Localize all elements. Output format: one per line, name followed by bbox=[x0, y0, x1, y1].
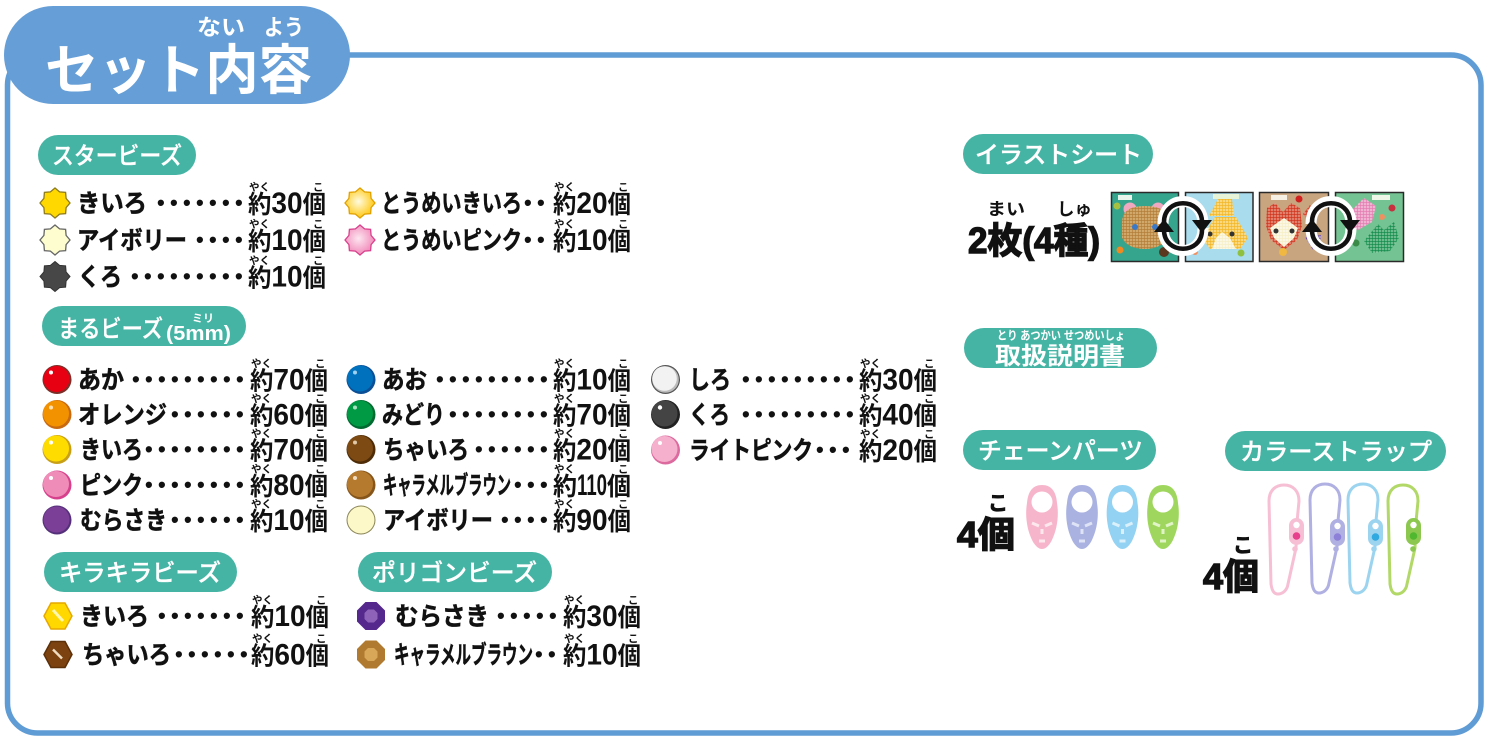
row: star clear pink: 約10個 bbox=[553, 224, 631, 257]
row: red: やく bbox=[251, 358, 272, 370]
heading: instruction manual: 取扱説明書 bbox=[995, 343, 1125, 370]
row: white: しろ bbox=[689, 366, 731, 394]
row: star black: ••••••••• bbox=[131, 264, 248, 288]
row: star ivory: やく bbox=[249, 218, 270, 230]
row: orange bbox=[42, 393, 328, 432]
row: star yellow: こ bbox=[313, 182, 324, 194]
row: ivory: •••• bbox=[501, 507, 553, 532]
heading: star beads: スタービーズ bbox=[52, 143, 182, 170]
row: purple: •••••• bbox=[171, 507, 249, 532]
row: star black: やく bbox=[249, 255, 270, 267]
row: star ivory bbox=[40, 218, 326, 257]
heading: instruction manual: とり あつかい せつめいしょ bbox=[997, 328, 1125, 342]
sheet: bear bbox=[1112, 192, 1178, 262]
heading: glitter beads: キラキラビーズ bbox=[59, 560, 221, 587]
sheet count: しゅ bbox=[1057, 200, 1092, 219]
row: orange: やく bbox=[251, 393, 272, 405]
row: pink: やく bbox=[251, 464, 272, 476]
row: green: やく bbox=[554, 393, 575, 405]
row: ivory bbox=[346, 498, 631, 537]
row: white: 約30個 bbox=[859, 364, 937, 396]
section: color straps bbox=[1203, 431, 1446, 597]
row: red: ••••••••• bbox=[132, 366, 249, 392]
row: glitter yellow: やく bbox=[252, 594, 273, 606]
row: star clear yellow: とうめいきいろ bbox=[381, 190, 522, 218]
section: glitter beads bbox=[44, 552, 329, 672]
row: light pink bbox=[651, 428, 937, 467]
arrow: swap loop right bbox=[1302, 202, 1360, 250]
row: light pink: やく bbox=[860, 428, 881, 440]
row: glitter yellow: きいろ bbox=[80, 603, 149, 631]
row: star clear pink: •• bbox=[524, 227, 550, 252]
row: star clear yellow: こ bbox=[618, 182, 628, 194]
row: ivory: こ bbox=[618, 498, 628, 510]
row: polygon purple: こ bbox=[628, 594, 638, 606]
row: blue: あお bbox=[382, 366, 427, 394]
row: caramel brown: キャラメルブラウン bbox=[383, 471, 511, 500]
heading: chain parts bbox=[963, 430, 1156, 470]
row: light pink: ••• bbox=[816, 437, 855, 462]
row: glitter brown: •••••• bbox=[175, 642, 253, 666]
row: star clear yellow: やく bbox=[554, 182, 575, 194]
row: star yellow: やく bbox=[249, 182, 270, 194]
row: red: 約70個 bbox=[250, 364, 328, 396]
row: green bbox=[346, 393, 631, 432]
row: yellow: やく bbox=[251, 428, 272, 440]
heading: star beads bbox=[38, 135, 196, 175]
row: pink: 約80個 bbox=[250, 469, 328, 502]
row: caramel brown: 個 bbox=[607, 473, 631, 501]
row: star ivory: こ bbox=[313, 218, 324, 230]
strap: sky blue bbox=[1348, 484, 1383, 593]
row: green: 約70個 bbox=[553, 398, 631, 432]
row: caramel brown: やく bbox=[554, 464, 575, 476]
section: illustration sheets bbox=[963, 134, 1404, 262]
row: star clear pink bbox=[345, 218, 631, 257]
row: brown: ちゃいろ bbox=[383, 436, 469, 464]
row: orange: 約60個 bbox=[250, 398, 328, 432]
row: glitter yellow: ••••••• bbox=[158, 603, 249, 628]
chain part: pink bbox=[1026, 485, 1058, 549]
row: glitter brown: 約60個 bbox=[251, 638, 329, 672]
row: polygon purple bbox=[357, 594, 641, 633]
heading: round beads: まるビーズ bbox=[58, 316, 163, 343]
sheet count bbox=[968, 200, 1100, 261]
row: polygon purple: ••••• bbox=[497, 603, 562, 628]
title tab bbox=[4, 6, 350, 104]
row: glitter brown: ちゃいろ bbox=[82, 642, 171, 670]
heading: polygon beads: ポリゴンビーズ bbox=[372, 560, 537, 587]
section: polygon beads bbox=[357, 552, 641, 672]
row: black: ••••••••• bbox=[742, 402, 859, 426]
arrow: swap loop left bbox=[1154, 202, 1212, 250]
row: pink: •••••••• bbox=[145, 472, 249, 497]
row: caramel brown: 約 bbox=[553, 473, 577, 501]
row: star black: 約10個 bbox=[248, 260, 326, 294]
row: black: こ bbox=[924, 393, 934, 405]
row: star black: こ bbox=[313, 255, 324, 267]
row: polygon caramel bbox=[357, 633, 641, 672]
row: glitter yellow: こ bbox=[316, 594, 326, 606]
count: color straps bbox=[1203, 535, 1259, 597]
heading: illustration sheets: イラストシート bbox=[975, 142, 1142, 169]
row: yellow bbox=[42, 428, 328, 466]
row: brown: やく bbox=[554, 428, 575, 440]
row: glitter brown: やく bbox=[252, 633, 273, 645]
heading: glitter beads bbox=[44, 552, 237, 592]
title tab: よう bbox=[264, 15, 304, 40]
row: ivory: やく bbox=[554, 498, 575, 510]
count: chain parts: 4個 bbox=[957, 514, 1015, 555]
row: yellow: こ bbox=[315, 428, 326, 440]
row: star clear yellow: •• bbox=[524, 190, 550, 215]
row: star yellow bbox=[40, 182, 326, 220]
chain part: periwinkle bbox=[1066, 485, 1098, 549]
row: glitter yellow: 約10個 bbox=[251, 600, 329, 633]
row: black: くろ bbox=[689, 402, 730, 430]
chain part: green bbox=[1147, 485, 1179, 549]
row: brown bbox=[346, 428, 631, 466]
strap: pink bbox=[1269, 485, 1304, 594]
row: star yellow: ••••••• bbox=[157, 190, 248, 215]
row: brown: こ bbox=[618, 428, 628, 440]
heading: color straps bbox=[1225, 431, 1446, 471]
row: ivory: アイボリー bbox=[383, 507, 493, 535]
row: light pink: ライトピンク bbox=[689, 437, 813, 465]
row: purple: やく bbox=[251, 498, 272, 510]
count: color straps: 4個 bbox=[1203, 556, 1259, 597]
row: pink bbox=[42, 464, 328, 502]
section: round beads bbox=[42, 306, 937, 537]
row: blue: ••••••••• bbox=[436, 366, 553, 392]
heading: color straps: カラーストラップ bbox=[1240, 439, 1432, 466]
row: black: 約40個 bbox=[859, 398, 937, 432]
row: black bbox=[651, 393, 937, 432]
row: glitter brown bbox=[44, 633, 329, 672]
row: star clear pink: とうめいピンク bbox=[381, 227, 522, 255]
row: star clear yellow bbox=[345, 182, 631, 220]
row: light pink: 約20個 bbox=[859, 434, 937, 467]
row: star clear yellow: 約20個 bbox=[553, 187, 631, 220]
count: color straps: こ bbox=[1233, 535, 1253, 557]
sheet: yellow dog bbox=[1186, 192, 1253, 262]
heading: polygon beads bbox=[358, 552, 552, 592]
row: green: みどり bbox=[382, 402, 445, 430]
strap: green bbox=[1388, 485, 1421, 594]
heading: round beads: ミリ bbox=[192, 313, 214, 325]
row: star black bbox=[40, 255, 326, 294]
row: black: やく bbox=[860, 393, 881, 405]
row: orange: オレンジ bbox=[78, 402, 167, 430]
row: purple: むらさき bbox=[80, 507, 167, 535]
row: blue bbox=[346, 358, 631, 396]
title tab: セット内容 bbox=[45, 41, 312, 101]
strap: periwinkle bbox=[1310, 484, 1345, 593]
row: orange: こ bbox=[315, 393, 326, 405]
row: caramel brown bbox=[346, 464, 631, 502]
row: pink: ピンク bbox=[80, 472, 143, 500]
row: caramel brown: ••• bbox=[514, 472, 553, 497]
row: caramel brown: 110 bbox=[577, 469, 607, 502]
sheet count: 2枚(4種) bbox=[968, 220, 1100, 261]
row: yellow: きいろ bbox=[80, 436, 143, 464]
heading: instruction manual bbox=[964, 328, 1157, 370]
heading: illustration sheets bbox=[963, 134, 1153, 174]
row: polygon caramel: こ bbox=[628, 633, 638, 645]
row: star ivory: •••• bbox=[196, 227, 248, 252]
heading: round beads: (5mm) bbox=[166, 323, 231, 345]
row: polygon caramel: やく bbox=[564, 633, 585, 645]
count: chain parts bbox=[957, 493, 1015, 555]
row: polygon caramel: •• bbox=[535, 642, 561, 666]
row: white: こ bbox=[924, 358, 934, 370]
row: green: こ bbox=[618, 393, 628, 405]
row: purple: こ bbox=[315, 498, 326, 510]
row: blue: やく bbox=[554, 358, 575, 370]
sheet: pink and green bbox=[1336, 192, 1404, 262]
title tab: ない bbox=[197, 15, 245, 40]
row: star yellow: きいろ bbox=[77, 190, 147, 218]
row: red bbox=[42, 358, 328, 396]
row: polygon caramel: 約10個 bbox=[563, 638, 641, 672]
row: blue: こ bbox=[618, 358, 628, 370]
row: caramel brown: こ bbox=[618, 464, 628, 476]
row: yellow: •••••••• bbox=[145, 436, 249, 462]
row: blue: 約10個 bbox=[553, 364, 631, 396]
heading: chain parts: チェーンパーツ bbox=[978, 438, 1143, 465]
row: white: やく bbox=[860, 358, 881, 370]
row: purple: 約10個 bbox=[250, 504, 328, 537]
chain part: sky blue bbox=[1107, 485, 1138, 549]
row: brown: 約20個 bbox=[553, 434, 631, 466]
heading: round beads bbox=[42, 306, 246, 346]
row: glitter yellow bbox=[44, 594, 329, 633]
row: pink: こ bbox=[315, 464, 326, 476]
row: star ivory: アイボリー bbox=[77, 227, 187, 255]
row: green: •••••••• bbox=[449, 402, 553, 426]
row: purple bbox=[42, 498, 328, 537]
row: brown: •••••• bbox=[475, 436, 553, 462]
row: ivory: 約90個 bbox=[553, 504, 631, 537]
row: polygon purple: やく bbox=[564, 594, 585, 606]
row: light pink: こ bbox=[924, 428, 934, 440]
row: star clear pink: こ bbox=[618, 218, 628, 230]
row: star clear pink: やく bbox=[554, 218, 575, 230]
row: white bbox=[651, 358, 937, 396]
sheet count: まい bbox=[987, 200, 1025, 219]
row: star black: くろ bbox=[78, 264, 122, 292]
row: red: あか bbox=[78, 366, 124, 394]
row: glitter brown: こ bbox=[316, 633, 326, 645]
row: polygon purple: 約30個 bbox=[563, 600, 641, 633]
sheet: red outline character bbox=[1260, 192, 1328, 262]
row: star ivory: 約10個 bbox=[248, 224, 326, 257]
section: star beads bbox=[38, 135, 631, 294]
row: red: こ bbox=[315, 358, 326, 370]
row: yellow: 約70個 bbox=[250, 434, 328, 466]
section: chain parts bbox=[957, 430, 1179, 555]
count: chain parts: こ bbox=[988, 493, 1008, 515]
row: polygon caramel: キャラメルブラウン bbox=[394, 640, 533, 670]
row: white: ••••••••• bbox=[742, 366, 859, 392]
row: star yellow: 約30個 bbox=[248, 187, 326, 220]
row: orange: •••••• bbox=[171, 402, 249, 426]
row: polygon purple: むらさき bbox=[395, 603, 489, 631]
